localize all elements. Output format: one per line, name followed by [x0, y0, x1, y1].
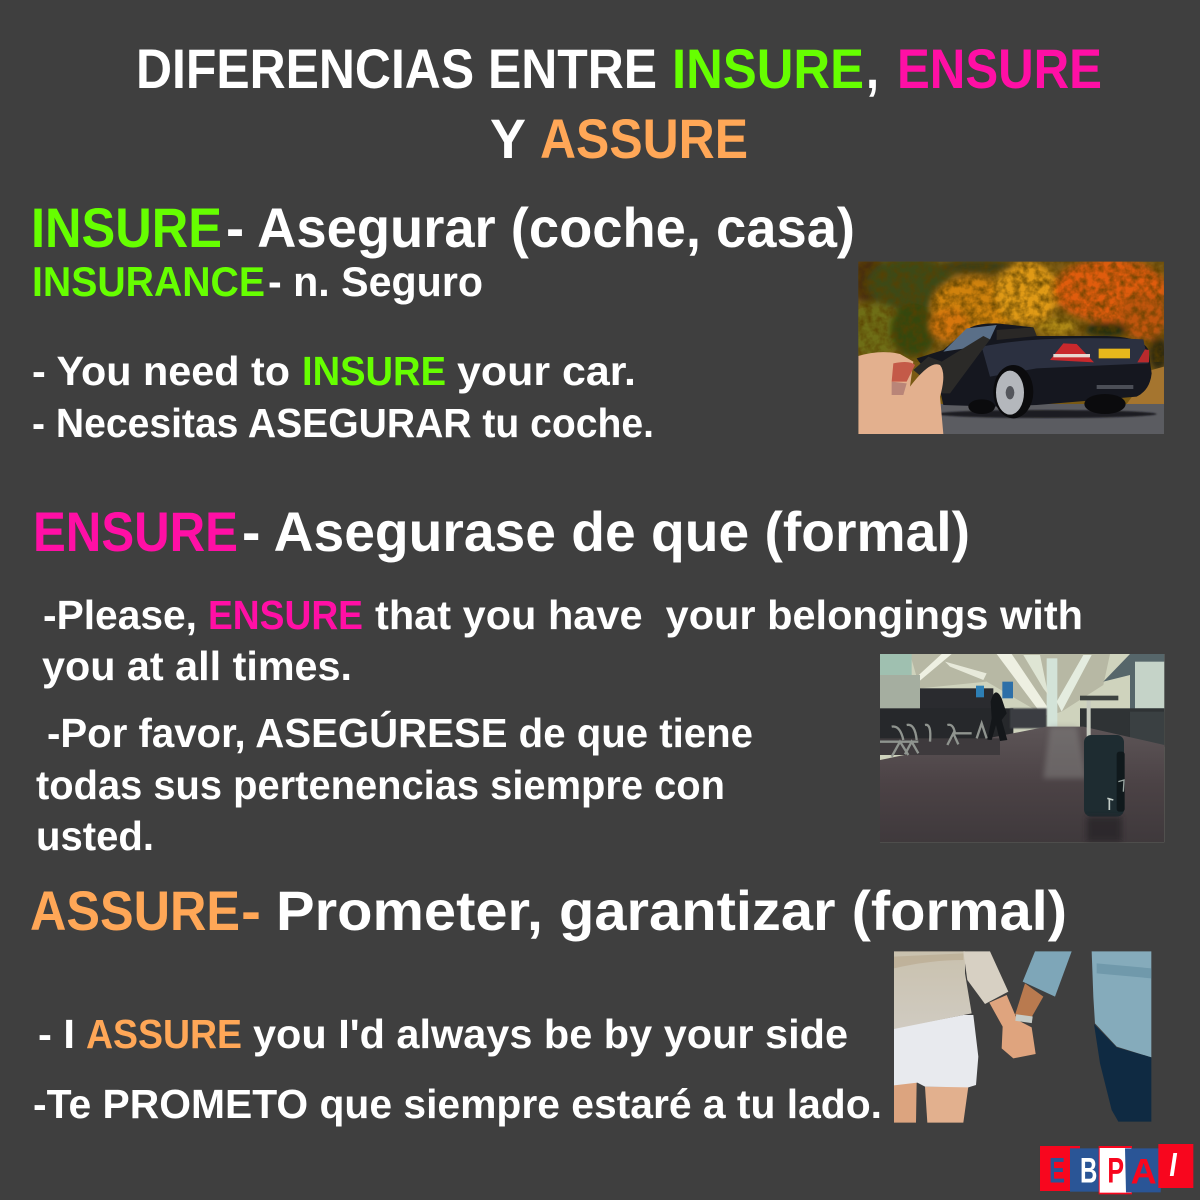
- heading: insure: - Asegurar (coche, casa): [226, 196, 855, 259]
- tail lights and plate: [1050, 343, 1094, 362]
- heading: insure: INSURE: [31, 196, 222, 259]
- woman shorts: [894, 1015, 978, 1087]
- logo: EBPAI: B: [1080, 1151, 1097, 1190]
- title: INSURE: [672, 37, 864, 100]
- right wall: [1103, 654, 1164, 712]
- road: [940, 404, 1164, 434]
- heading: assure: ASSURE: [30, 879, 240, 942]
- example: assure: - I: [38, 1011, 75, 1057]
- heading: ensure: ENSURE: [33, 500, 238, 563]
- man shirt: [1092, 951, 1151, 1057]
- heading: assure: -: [241, 879, 261, 942]
- title: ,: [866, 37, 879, 100]
- gate area dark: [920, 688, 994, 708]
- example: insure: your car.: [457, 348, 636, 394]
- title: ENSURE: [897, 37, 1102, 100]
- example: ensure: usted.: [36, 813, 154, 859]
- ceiling: [910, 654, 1110, 717]
- example: ensure: todas sus pertenencias siempre con: [36, 762, 725, 808]
- seats: [880, 723, 987, 757]
- title: [136, 37, 1102, 170]
- logo: EBPAI: A: [1131, 1152, 1157, 1191]
- car body: [917, 323, 1152, 407]
- subheading: insurance: - n. Seguro: [268, 258, 483, 305]
- hand: [858, 352, 943, 434]
- subheading: insurance: [32, 258, 483, 305]
- title: ASSURE: [540, 107, 748, 170]
- heading: assure: Prometer, garantizar (formal): [276, 879, 1067, 942]
- logo: EBPAI: E: [1049, 1151, 1065, 1190]
- panel: ensure: [33, 500, 1083, 859]
- example: ensure: ENSURE: [208, 592, 363, 638]
- example: ensure: you at all times.: [42, 643, 352, 689]
- example: insure: [32, 348, 654, 446]
- man sleeve: [1023, 951, 1072, 997]
- key: [913, 336, 990, 393]
- example: assure: ASSURE: [86, 1011, 242, 1057]
- man trousers: [1094, 1024, 1151, 1122]
- image: car and key: [843, 257, 1168, 434]
- example: ensure: -Please,: [43, 592, 197, 638]
- example: assure: -Te PROMETO que siempre estaré a tu lado.: [33, 1081, 882, 1127]
- logo: EBPAI: P: [1107, 1151, 1124, 1190]
- example: ensure: [36, 592, 1083, 859]
- example: ensure: -Por favor, ASEGÚRESE de que tiene: [47, 710, 753, 756]
- heading: ensure: - Asegurase de que (formal): [242, 500, 970, 563]
- panel: insure: [31, 196, 855, 446]
- example: insure: - You need to: [32, 348, 290, 394]
- woman top: [894, 951, 972, 1029]
- image: airport and suitcase: [880, 654, 1164, 842]
- walking man: [987, 692, 1007, 741]
- example: assure: [33, 1011, 882, 1127]
- example: insure: - Necesitas ASEGURAR tu coche.: [32, 400, 654, 446]
- left wall: [880, 654, 912, 677]
- suitcase: [1087, 698, 1091, 738]
- woman legs: [894, 1082, 917, 1123]
- floor: [880, 727, 1164, 842]
- example: ensure: that you have your belongings with: [375, 592, 1083, 638]
- example: assure: you I'd always be by your side: [253, 1011, 848, 1057]
- image: couple holding hands: [894, 951, 1151, 1123]
- title: Y: [490, 107, 526, 170]
- logo: EBPAI: I: [1169, 1147, 1177, 1184]
- wheels: [993, 365, 1033, 418]
- example: insure: INSURE: [302, 348, 446, 394]
- title: DIFERENCIAS ENTRE: [136, 37, 657, 100]
- subheading: insurance: INSURANCE: [32, 258, 265, 305]
- logo: EBPAI: [1040, 1144, 1193, 1194]
- arms and hands: [989, 995, 1036, 1058]
- panel: assure: [30, 879, 1067, 1127]
